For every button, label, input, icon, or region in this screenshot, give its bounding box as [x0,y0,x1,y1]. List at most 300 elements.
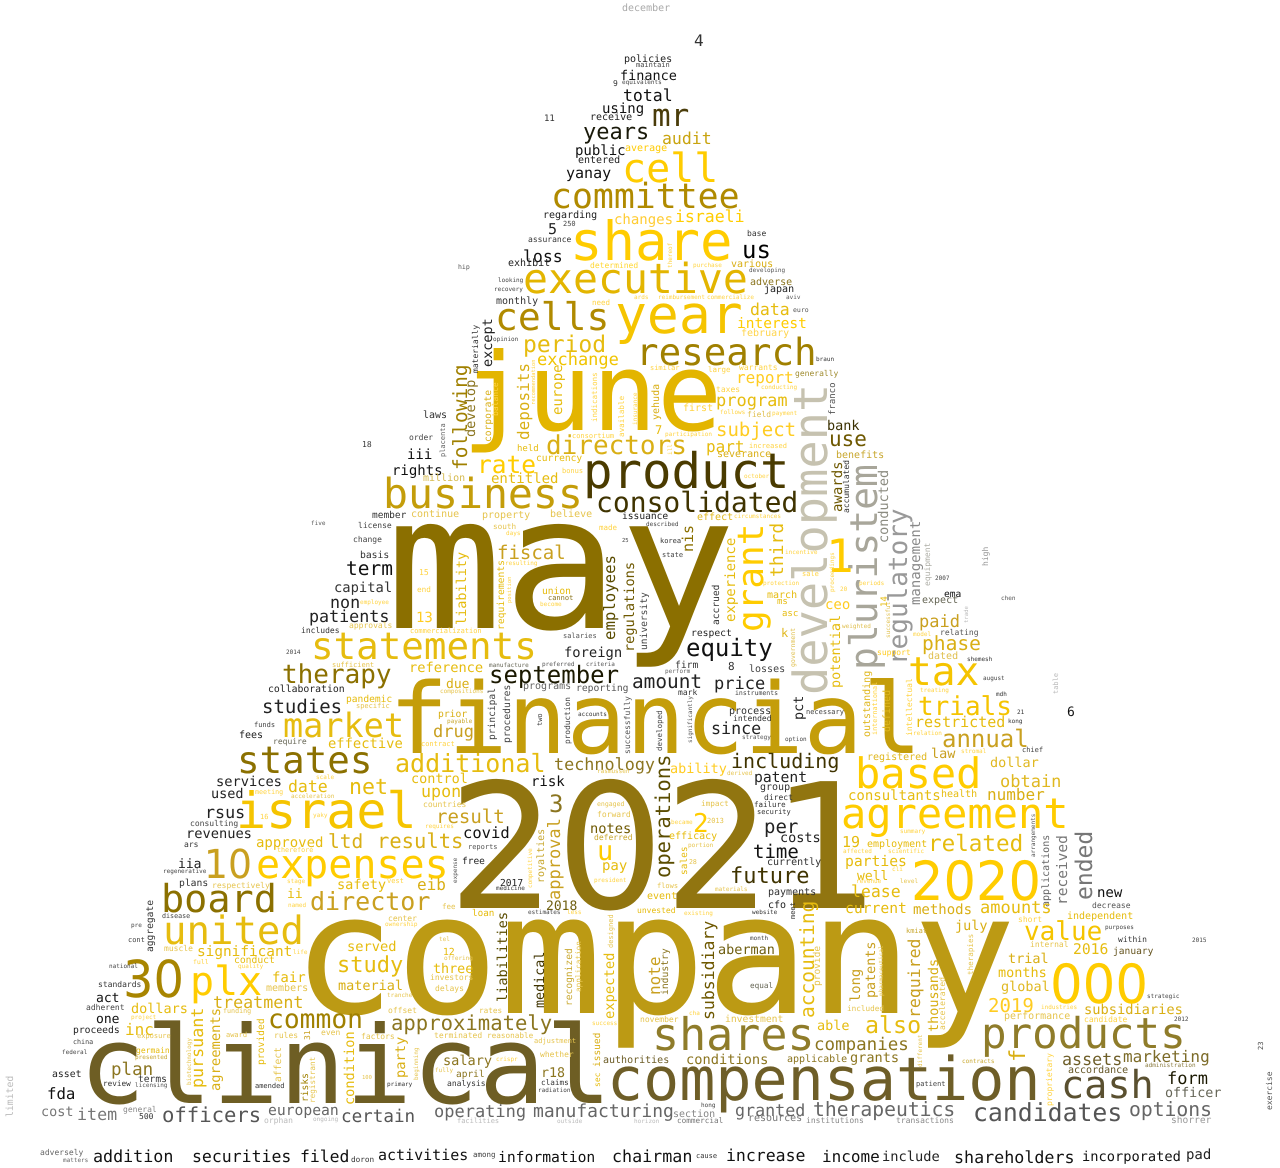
words: right flank, middle: security [757,808,791,816]
words: apex of the triangle: entered [578,155,620,166]
words: centre, inside the large numerals: notes [590,821,631,837]
words: apex of the triangle: total [623,86,673,105]
words: lower right: different [917,1034,924,1067]
words: lower left: adherent [86,1003,125,1012]
word: states: states [237,738,372,782]
words: lower centre: adjustment [534,1037,576,1045]
words: lower centre: whether [540,1050,574,1059]
words: right flank, middle: successful [885,601,892,638]
words: apex of the triangle: monthly [496,296,538,307]
word: agreement: agreement [841,789,1069,838]
words: lower left: asset [52,1069,82,1080]
words: lower right: candidate [1084,1015,1128,1024]
words: bottom strip: increase [726,1146,805,1165]
words: left flank, middle: regenerative [163,868,207,875]
words: upper middle: braun [816,356,834,363]
words: right flank, middle: number [987,785,1045,804]
words: margin outliers: 23 [1257,1042,1265,1050]
words: apex of the triangle: maintain [636,61,670,69]
words: upper middle: conducting [761,384,798,391]
words: grey base row [41,1098,955,1127]
words: inside "company": recognized [564,948,575,1006]
words: lower centre: claims [541,1078,569,1087]
words: centre, inside the large numerals: deferred [594,833,633,842]
words: lower left: pursuant [187,1008,207,1088]
words: inside "company": industry [660,948,671,995]
words: left flank, middle: union [542,586,571,597]
words: centre, inside the large numerals: medicine [496,885,525,892]
words: right flank, middle: sale [802,570,819,578]
words: centre, inside the large numerals: preferred [542,661,575,668]
words: upper middle: ill [667,444,674,455]
words: left flank, middle: date [288,777,328,796]
words: lower right: decrease [1092,901,1131,910]
words: inside "company": provide [812,946,823,986]
words: upper middle [362,318,884,523]
words: left flank, middle: license [358,521,392,530]
word: committee: committee [551,177,740,217]
words: left flank, middle: korea [660,537,681,545]
words: inside "company" [337,900,823,1020]
words: right flank, middle: periods [859,580,885,587]
words: left flank, middle: director [310,887,430,916]
words: apex of the triangle: average [625,143,667,154]
words: left flank, middle: term [346,557,393,580]
words: inside "company": equal [750,981,773,990]
words: margin outliers: exercise [1265,1071,1274,1110]
words: lower left: review [103,1079,131,1088]
words: left flank, middle: fiscal [497,542,566,564]
words: lower right: 2015 [1192,937,1207,944]
words: centre, inside the large numerals: firm [675,660,698,671]
words: lower left: disease [162,912,190,920]
words: right flank, middle: 2007 [935,575,950,582]
words: lower left [47,900,552,1105]
words: lower right: global [1001,979,1050,995]
words: left flank, middle: funds [254,721,275,729]
words: left flank, middle: contract [421,740,455,748]
words: right flank, middle: affected [843,848,872,855]
words: grey base row: institutions [806,1116,864,1125]
words: right flank, middle: kong [1008,718,1023,725]
words: lower centre: authorities [603,1055,669,1066]
words: lower left: life [293,949,308,956]
words: lower centre: crispr [496,1056,518,1063]
words: left flank, middle: eib [417,875,446,894]
words: upper middle: benefits [836,450,884,461]
words: lower left: significant [197,944,292,960]
words: right flank, middle: ms [777,597,788,607]
words: lower left: amended [255,1082,285,1090]
words: lower right: thousands [926,959,942,1032]
words: centre, inside the large numerals: 8 [728,660,735,673]
words: inside "company": website [752,909,778,916]
words: left flank, middle: reference [409,660,483,676]
words: lower right: assets [1062,1049,1122,1069]
words: lower centre: november [640,1015,679,1024]
words: grey base row: facilities [457,1117,499,1125]
words: bottom strip: information [498,1149,595,1166]
words: lower right: internal [1030,940,1069,949]
word: 2020: 2020 [911,850,1041,913]
words: right flank, middle: 6 [1067,705,1075,720]
word: development: development [784,384,839,695]
words: bottom strip: include [882,1149,940,1165]
words: inside "company": investors [430,973,474,982]
words: apex of the triangle: december [622,3,670,14]
words: apex of the triangle: adverse [750,277,792,288]
words: left flank, middle: cannot [548,594,573,602]
words: lower left: licensing [135,1082,168,1089]
words: lower left: approximately [391,1011,552,1035]
words: lower right: independent [1067,911,1133,922]
words: upper middle: field [747,410,771,419]
words: apex of the triangle: purchase [693,262,722,269]
words: bottom strip: income [822,1147,880,1166]
words: right flank, middle: shemesh [967,656,993,663]
words: centre, inside the large numerals: became [671,819,693,826]
words: lower left: cont [128,936,145,944]
words: centre, inside the large numerals: successfully [623,696,632,754]
words: left flank, middle: sufficient [332,661,374,669]
words: right flank, middle: restricted [915,713,1005,731]
words: right flank, middle: option [785,736,807,743]
words: lower right: trial [1008,951,1049,967]
words: right flank, middle: health [941,789,977,800]
words: lower centre: grants [850,1050,899,1066]
words: left flank, middle: basis [360,550,389,561]
word: consolidated: consolidated [596,486,798,519]
words: lower right: included [847,1004,884,1013]
words: lower right: accelerated [938,977,947,1030]
words: right flank, middle: regulatory [884,508,914,665]
words: left flank, middle: vest [387,877,404,885]
words: lower right: form [1167,1069,1208,1089]
words: left flank, middle: liability [454,552,470,625]
words: upper middle: increased [749,442,787,450]
words: inside "company": delays [435,984,464,993]
words: upper middle: indications [590,372,599,422]
words: centre, inside the large numerals: portion [688,842,714,849]
words: right flank, middle: march [767,590,797,601]
words: upper middle: follows [720,409,746,416]
word: cells: cells [495,295,609,339]
words: inside "company": center [388,914,417,923]
words: left flank, middle: capital [334,580,392,596]
words: apex of the triangle: using [602,101,644,117]
words: left flank, middle: five [311,520,326,527]
words: left flank, middle: pandemic [346,694,392,705]
words: right flank, middle: law [931,746,956,762]
words: lower left: national [109,963,138,970]
words: lower right: accordance [1068,1065,1128,1076]
words: apex of the triangle: commercialize [707,294,754,301]
words: left flank, middle: results [377,829,463,853]
words: lower centre: conditions [686,1052,768,1068]
words: left flank, middle: result [436,806,505,828]
word: shares: shares [652,1008,815,1061]
words: grey base row: granted [735,1100,805,1120]
words: grey base row: cost [41,1104,74,1120]
words: left flank, middle: member [372,510,407,521]
words: right flank, middle: intellectual [905,678,914,736]
words: centre, inside the large numerals: accounts [578,711,607,718]
words: centre, inside the large numerals: efficacy [669,831,717,842]
words: inside "company": ownership [385,921,418,928]
words: right flank, middle: payments [768,887,816,898]
words: grey base row: commercial [677,1116,723,1125]
words: lower right: within [1118,935,1147,944]
words: lower right: 2012 [1174,1016,1189,1023]
words: grey base row: operating [434,1102,526,1122]
words: right flank, middle: august [983,675,1005,682]
words: grey base row: horizon [634,1118,660,1125]
words: right flank, middle: incentive [785,549,818,556]
words: inside "company": accounting [796,901,819,1018]
words: right flank, middle: ended [1072,831,1098,900]
words: centre, inside the large numerals: manufacture [489,662,529,669]
words: upper middle: severance [717,449,771,460]
words: grey base row: officers [162,1103,261,1127]
words: inside "company": three [433,962,473,977]
words: apex of the triangle: various [731,259,773,270]
words: centre, inside the large numerals: losses [749,664,785,675]
words: right flank, middle: currently [767,857,821,868]
word: united: united [163,909,304,954]
word: 000: 000 [1050,953,1148,1016]
words: lower right: also [865,1012,921,1039]
words: right flank, middle: failure [754,800,786,809]
word: 2021: 2021 [448,747,880,950]
words: centre, inside the large numerals: significantly [687,696,694,743]
words: lower left: china [73,1038,93,1046]
words: upper middle: consortium [572,432,614,440]
words: lower right [845,885,1221,1126]
words: bottom strip: adversely [40,1148,84,1157]
words: left flank, middle: due [446,677,470,692]
word: 10: 10 [204,842,252,888]
words: right flank, middle: third [767,523,788,577]
words: grey base row: certain [341,1107,415,1127]
words: left flank, middle: collaboration [268,684,345,695]
words: right flank, middle: lease [851,882,901,901]
words: lower centre: fully [435,1067,453,1074]
words: grey base row: manufacturing [533,1101,674,1122]
words: centre, inside the large numerals: amount [632,670,702,693]
words: lower right: industries [1041,1004,1078,1011]
words: apex of the triangle: audit [662,129,712,148]
words: centre, inside the large numerals: strategy [742,734,771,741]
words: right flank, middle: trade [963,606,970,623]
words: centre, inside the large numerals: since [711,718,761,738]
words: bottom strip: doron [351,1155,374,1164]
word: market: market [283,706,404,745]
words: inside "company": tranche [387,992,413,999]
words: apex of the triangle: yanay [566,164,611,182]
words: lower right: methods [913,902,972,918]
words: inside "company": month [750,935,768,942]
words: lower left: conduct [234,955,275,966]
words: bottom strip: cause [696,1152,717,1160]
words: centre, inside the large numerals: 28 [689,858,697,866]
words: lower right: administration [1145,1062,1196,1069]
word: may: may [386,455,736,672]
words: inside "company": tel [439,936,450,943]
words: upper middle: taxes [716,385,740,394]
words: upper middle: materially [471,325,480,373]
words: centre, inside the large numerals: derived [727,770,753,777]
words: grey base row: hong [701,1102,716,1109]
words: apex of the triangle: need [592,298,610,307]
words: left flank, middle: become [540,601,562,608]
words: lower right: required [905,939,924,1018]
words: inside "company": aberman [718,942,775,958]
words: inside "company": expected [602,953,618,1019]
words: inside "company": offering [444,955,473,962]
word: year: year [615,285,743,346]
words: grey base row: ongoing [313,1116,339,1123]
words: lower right: proprietary [1045,1053,1054,1106]
words: apex of the triangle: interest [737,316,807,332]
words: bottom strip: addition [93,1146,173,1166]
words: left flank, middle: therefore [277,846,313,854]
words: apex of the triangle: ards [634,294,649,301]
words: right flank, middle: employment [867,839,927,850]
words: right flank, middle: group [760,782,790,793]
words: lower left: fair [272,970,306,986]
words: upper middle: participation [665,431,712,438]
word: products: products [981,1010,1186,1059]
words: apex of the triangle: 250 [563,220,576,228]
words: centre, inside the large numerals: operations [651,755,675,878]
words: right flank, middle: pct [791,696,807,720]
words: lower right: strategic [1147,993,1180,1000]
words: upper middle: bonus [562,467,583,475]
words: upper middle: accumulated [842,460,851,513]
words: centre, inside the large numerals: estimates [528,909,561,916]
words: centre, inside the large numerals: loan [472,908,494,919]
word: plx: plx [190,959,262,1005]
words: upper middle: bank [827,418,860,434]
words: centre, inside the large numerals: pay [602,858,627,874]
words: upper middle: currency [536,453,582,464]
words: right flank, middle: proceedings [829,552,836,592]
words: left flank, middle: non [330,592,360,612]
words: left flank, middle: includes [301,626,340,635]
words: upper middle: similar [650,364,680,372]
words: right flank, middle: arrangements [1030,813,1037,857]
words: right flank, middle: treating [920,687,949,694]
words: grey base row: therapeutics [813,1098,955,1121]
words: right flank, middle: management [908,521,924,605]
words: right flank, middle: trials [918,692,1012,722]
words: lower centre: success [592,1020,618,1027]
words: lower right: long [848,969,864,1002]
words: right flank, middle: relating [940,628,979,637]
words: right flank, middle: protection [763,580,800,587]
words: lower left: factors [361,1032,395,1041]
words: lower right: new [1097,885,1123,901]
words: right flank, middle: asc [782,609,798,619]
words: left flank, middle: yaky [313,812,328,819]
words: right flank, middle: defined [882,690,893,732]
words: right flank, middle: table [1052,673,1060,694]
words: lower left: members [266,983,308,994]
words: centre, inside the large numerals: principal [487,688,498,740]
word: company: company [292,859,1016,1053]
words: centre, inside the large numerals: competitive [527,848,534,888]
words: left flank, middle: fees [239,730,263,741]
words: centre, inside the large numerals: two [536,713,544,726]
words: inside "company": fee [442,902,456,911]
words: apex of the triangle: hip [458,263,470,271]
words: left flank, middle: approved [256,835,323,851]
words: upper middle: effect [697,512,733,523]
words: upper middle: opinion [493,336,519,343]
words: upper middle: subject [716,419,796,441]
words: right flank, middle: dated [928,651,958,662]
words: centre, inside the large numerals: risk [531,774,565,790]
words: lower left: beginning [413,1047,420,1080]
words: lower right: 2019 [988,995,1034,1017]
words: apex of the triangle: policies [624,54,672,65]
words: lower left: dollars [131,1001,188,1017]
words: lower left: biotechnology [186,1038,193,1085]
words: upper middle: payment [772,410,798,417]
words: lower left: presented [135,1054,168,1061]
words: bottom strip: shareholders [954,1147,1075,1167]
words: bottom strip: activities [378,1146,468,1164]
words: right flank, middle: received [1055,835,1071,905]
words: left flank, middle: south [493,522,516,531]
words: right flank, middle: 21 [1017,709,1025,716]
words: right flank, middle: high [981,547,990,566]
words: left flank, middle: iia [178,857,201,872]
word: candidates: candidates [973,1098,1122,1127]
words: left flank, middle: patients [309,606,389,626]
words: centre, inside the large numerals: existing [684,910,713,917]
words: lower left: even [321,1028,340,1037]
words: left flank, middle: stage [287,878,305,885]
words: centre, inside the large numerals: mark [678,688,697,697]
words: upper middle: generally [795,369,839,378]
words: right flank, middle: necessary [806,708,844,716]
words: grey base row: general [123,1105,157,1114]
words: lower centre: analysis [447,1079,486,1088]
words: left flank, middle: studies [262,696,342,718]
words: margin outliers: limited [5,1076,16,1117]
word: based: based [855,749,981,798]
words: lower right: contracts [962,1058,995,1065]
words: apex of the triangle: mr [652,98,689,134]
words: apex of the triangle: data [750,300,790,319]
words: upper middle: develop [463,380,479,437]
words: lower left: rules [274,1031,298,1040]
words: apex of the triangle: regarding [543,210,597,221]
words: upper middle: circumstances [734,513,781,520]
words: lower centre: applicable [787,1054,847,1065]
words: left flank, middle: made [599,523,618,532]
words: lower centre: issued [592,1033,603,1067]
words: right flank, middle: related [928,831,1023,857]
words: right flank, middle: costs [780,830,821,846]
word: share: share [570,210,733,273]
words: left flank, middle: plans [179,878,208,889]
words: apex of the triangle: years [583,120,649,145]
words: upper middle: available [617,395,626,437]
words: upper middle: entitled [491,471,558,487]
words: centre, inside the large numerals: procedures [502,685,513,743]
